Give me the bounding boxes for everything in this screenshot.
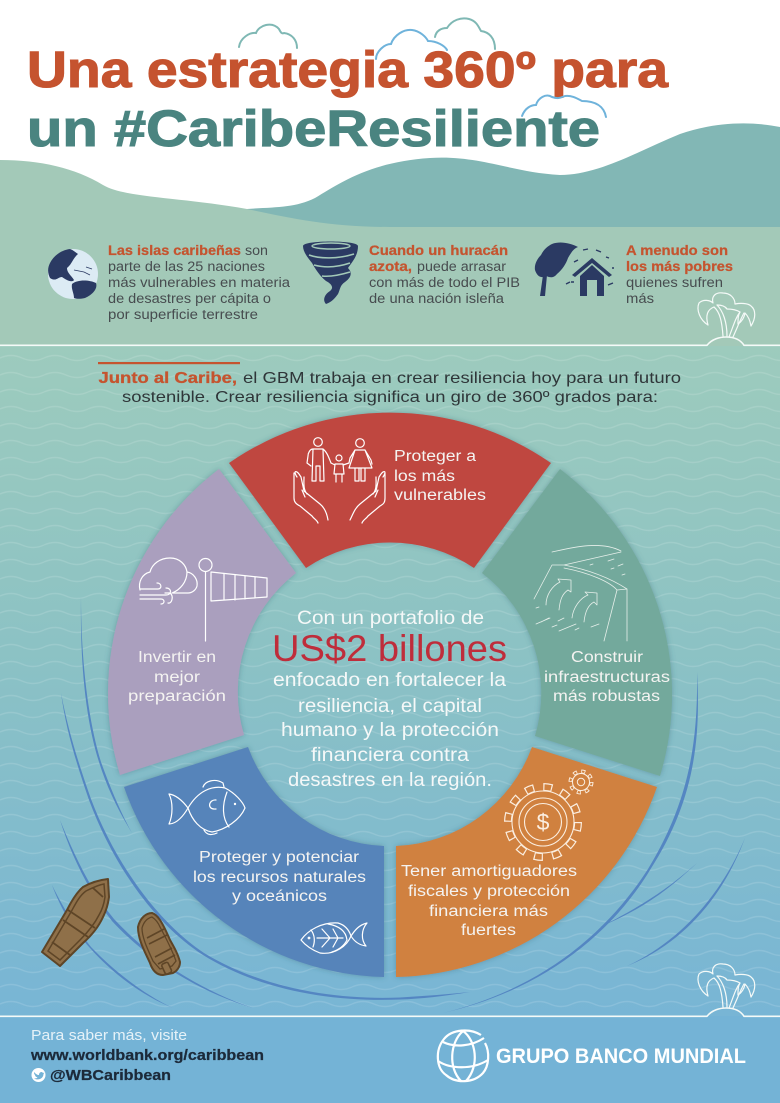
stat: islands: son bbox=[245, 243, 268, 258]
intro text bbox=[98, 362, 681, 406]
label: preparación bbox=[128, 688, 226, 705]
title: Una estrategia 360º para bbox=[27, 41, 669, 98]
label: Proteger a bbox=[394, 448, 476, 465]
label: Invertir en bbox=[138, 649, 216, 666]
label: los recursos naturales bbox=[193, 869, 366, 886]
center text bbox=[272, 607, 507, 791]
label: Construir bbox=[571, 649, 643, 666]
icon: gears with dollar bbox=[508, 772, 592, 857]
stat: the poorest: quienes sufren bbox=[626, 275, 723, 290]
stat: the poorest: más bbox=[626, 291, 654, 306]
icon: cloud and windsock bbox=[139, 558, 267, 641]
icon: tropical fish bbox=[301, 923, 367, 953]
center text: resiliencia, el capital bbox=[298, 695, 482, 717]
stat: hurricane: con más de todo el PIB bbox=[369, 275, 520, 290]
footer links: Para saber más, visite bbox=[31, 1028, 187, 1044]
center text: enfocado en fortalecer la bbox=[273, 669, 506, 691]
label: Tener amortiguadores bbox=[401, 863, 577, 880]
label: vulnerables bbox=[394, 487, 486, 504]
stat: hurricane: puede arrasar bbox=[417, 259, 507, 274]
logo: Grupo Banco Mundial bbox=[438, 1030, 746, 1081]
stat: hurricane: de una nación isleña bbox=[369, 291, 505, 306]
panel: construir infraestructuras más robustas bbox=[482, 469, 672, 776]
footer links bbox=[30, 1028, 264, 1084]
icon: family and hands bbox=[294, 438, 385, 523]
icon: gears with dollar: $ bbox=[537, 809, 550, 835]
panel: invertir en mejor preparación bbox=[108, 469, 296, 775]
label bbox=[394, 448, 486, 504]
label bbox=[193, 849, 366, 905]
title: un #CaribeResiliente bbox=[27, 100, 600, 157]
label: infraestructuras bbox=[544, 669, 670, 686]
label: Proteger y potenciar bbox=[199, 849, 359, 866]
divider with island and palms (top) bbox=[0, 293, 780, 345]
label bbox=[544, 649, 670, 705]
label: más robustas bbox=[553, 688, 660, 705]
stat: islands bbox=[108, 243, 291, 322]
logo: Grupo Banco Mundial: GRUPO BANCO MUNDIAL bbox=[496, 1045, 746, 1068]
icon: twitter bbox=[32, 1068, 46, 1082]
swirl strokes bbox=[52, 597, 745, 1013]
icon: fish bbox=[169, 780, 245, 835]
icon: house and tree in the storm bbox=[535, 243, 614, 296]
icon: tornado bbox=[303, 242, 358, 304]
label: mejor bbox=[154, 669, 200, 686]
label bbox=[401, 863, 577, 939]
icon: globe bbox=[48, 249, 98, 299]
label bbox=[128, 649, 226, 705]
icon: globe logo bbox=[438, 1030, 488, 1081]
label: financiera más bbox=[429, 903, 548, 920]
stat: islands: Las islas caribeñas bbox=[108, 243, 241, 258]
stat: hurricane bbox=[369, 243, 520, 306]
panel: proteger a los más vulnerables bbox=[229, 413, 551, 568]
stat: islands: más vulnerables en materia bbox=[108, 275, 291, 290]
intro text: Junto al Caribe, bbox=[98, 370, 237, 387]
stat: islands: por superficie terrestre bbox=[108, 307, 258, 322]
divider with island and palms (bottom) bbox=[0, 964, 780, 1016]
center text: desastres en la región. bbox=[288, 769, 492, 791]
stat: islands: parte de las 25 naciones bbox=[108, 259, 265, 274]
icon: dam and waves bbox=[534, 545, 627, 641]
boats bbox=[42, 879, 180, 975]
stat: hurricane: Cuando un huracán bbox=[369, 243, 508, 258]
footer links: www.worldbank.org/caribbean bbox=[30, 1048, 264, 1064]
panel: tener amortiguadores fiscales bbox=[396, 747, 657, 977]
center text: financiera contra bbox=[311, 744, 469, 766]
stat: the poorest bbox=[626, 243, 733, 306]
center text: US$2 billones bbox=[272, 628, 507, 669]
label: y oceánicos bbox=[232, 888, 327, 905]
label: los más bbox=[394, 468, 455, 485]
center text: humano y la protección bbox=[281, 719, 499, 741]
label: fiscales y protección bbox=[408, 883, 570, 900]
center text: Con un portafolio de bbox=[297, 607, 484, 629]
stat: hurricane: azota, bbox=[369, 259, 412, 274]
label: fuertes bbox=[461, 922, 516, 939]
stat: the poorest: los más pobres bbox=[626, 259, 733, 274]
stat: the poorest: A menudo son bbox=[626, 243, 728, 258]
clouds bbox=[239, 18, 606, 117]
title bbox=[27, 41, 669, 157]
intro text: el GBM trabaja en crear resiliencia hoy para un futuro bbox=[243, 370, 681, 387]
stat: islands: de desastres per cápita o bbox=[108, 291, 271, 306]
footer links: @WBCaribbean bbox=[50, 1067, 171, 1084]
panel: proteger recursos naturales bbox=[124, 747, 384, 977]
intro text: sostenible. Crear resiliencia significa un giro de 360º grados para: bbox=[122, 389, 658, 406]
